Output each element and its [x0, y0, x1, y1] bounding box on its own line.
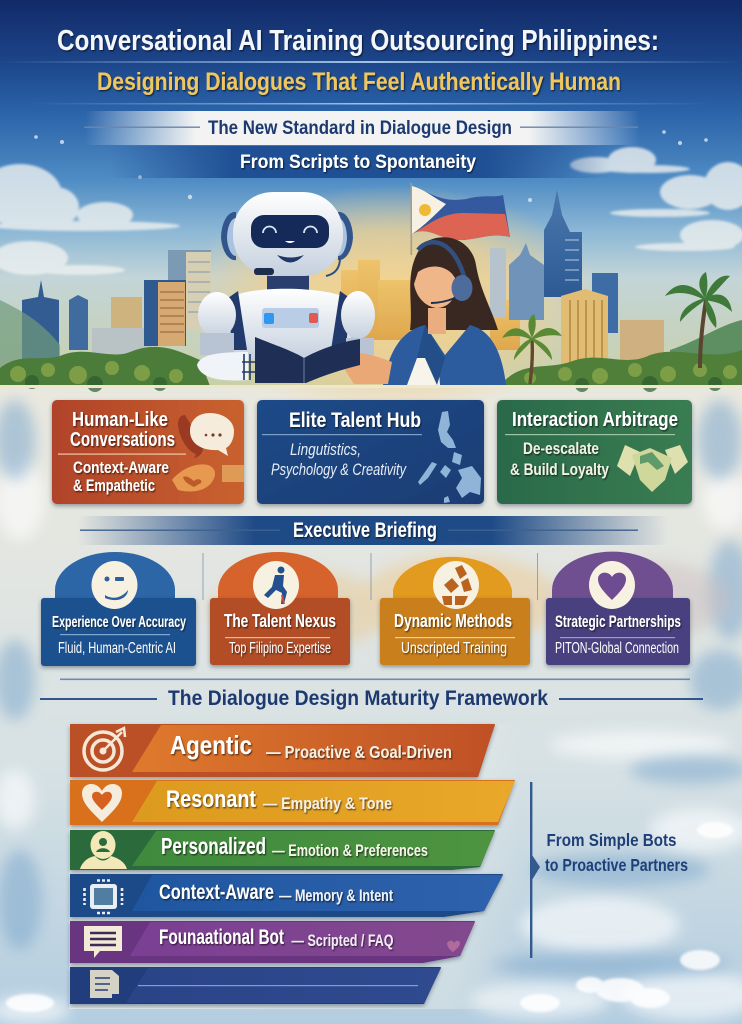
banner: new standard: The New Standard in Dialogue Design: [208, 117, 512, 139]
icon: Philippines map: [418, 411, 481, 503]
woman headset: [418, 242, 465, 280]
banner: from scripts to spontaneity: [110, 146, 610, 178]
panel: Experience Over Accuracy: Fluid, Human-Centric AI: [58, 640, 176, 657]
bar: Personalized: — Emotion & Preferences: [272, 842, 428, 860]
panel: Human-Like Conversations: Conversations: [70, 429, 175, 451]
panel: The Talent Nexus: Top Filipino Expertise: [229, 640, 331, 657]
bar: Foundational Bot: — Scripted / FAQ: [292, 932, 394, 950]
woman face: [414, 266, 456, 308]
panel: Human-Like Conversations: [52, 400, 244, 504]
hero: sky and clouds: [0, 0, 742, 415]
header band lines: [0, 61, 742, 104]
city skyline: [0, 190, 742, 392]
panel: The Talent Nexus: [210, 552, 350, 665]
callout: from simple bots to proactive partners: to Proactive Partners: [545, 855, 688, 875]
panel: Dynamic Methods: Dynamic Methods: [394, 611, 512, 631]
icon: handshake: [617, 445, 688, 492]
bar: Agentic: — Proactive & Goal-Driven: [266, 742, 452, 762]
panel: Dynamic Methods: Unscripted Training: [401, 640, 507, 657]
icon: palm tree small: [502, 314, 562, 384]
icon: heart: [589, 561, 635, 609]
icon: person: [80, 831, 127, 869]
icon: chat bubbles: [178, 413, 234, 458]
panel: Elite Talent Hub: Elite Talent Hub: [289, 409, 421, 432]
panel: Human-Like Conversations: Context-Aware: [73, 458, 169, 477]
callout: from simple bots to proactive partners: [545, 830, 688, 875]
woman blazer: [383, 325, 506, 385]
icon: open book: [255, 337, 360, 383]
subtitle: Designing Dialogues That Feel Authentically Human: [97, 68, 621, 96]
arrow: maturity direction: [530, 782, 540, 958]
bar: Agentic: Agentic: [170, 730, 252, 760]
icon: target: [84, 728, 125, 770]
icon: document: [90, 970, 119, 998]
banner: from scripts to spontaneity: From Scripts to Spontaneity: [240, 151, 476, 173]
icon: caring hand: [172, 464, 244, 491]
decorative briefing backdrop: [210, 555, 730, 650]
panel: The Talent Nexus: The Talent Nexus: [224, 611, 336, 631]
robot arms: [197, 291, 375, 380]
panel: Elite Talent Hub: [257, 400, 484, 504]
divider line: [60, 678, 690, 680]
banner: new standard: [84, 111, 640, 145]
icon: chat lines: [84, 926, 122, 958]
hills and foliage: [0, 300, 742, 392]
bar: Context-Aware: Context-Aware: [159, 881, 274, 904]
icon: palm tree right: [665, 272, 732, 368]
bar: base layer: [70, 967, 441, 1004]
heading: Executive Briefing: Executive Briefing: [293, 519, 437, 542]
bar: Context-Aware: — Memory & Intent: [279, 887, 393, 905]
panel: Human-Like Conversations: Human-Like: [72, 409, 168, 431]
heading: maturity framework: The Dialogue Design Maturity Framework: [168, 687, 548, 710]
panel: Experience Over Accuracy: [41, 552, 196, 666]
icon: Philippine flag: [410, 183, 510, 255]
panel: Interaction Arbitrage: & Build Loyalty: [510, 460, 609, 479]
icon: talking face: [92, 561, 138, 609]
panel: Interaction Arbitrage: De-escalate: [523, 439, 599, 458]
robot torso: [228, 289, 352, 360]
hero bottom edge: [0, 385, 742, 388]
callout: from simple bots to proactive partners: From Simple Bots: [546, 830, 677, 850]
panel: Human-Like Conversations: & Empathetic: [73, 476, 155, 495]
bar: Personalized: [70, 830, 495, 870]
robot head: [221, 192, 353, 276]
bar: Foundational Bot: [70, 921, 475, 963]
illustration: woman with headset: [336, 237, 506, 385]
panel: Elite Talent Hub: Psychology & Creativity: [271, 460, 407, 479]
bar: Agentic: [70, 724, 495, 777]
bar: Personalized: Personalized: [161, 833, 266, 859]
icon: building blocks: [433, 561, 479, 609]
woman hand: [336, 351, 392, 384]
icon: chip: [84, 880, 122, 913]
icon: running figure: [253, 561, 299, 609]
panel: Strategic Partnerships: [546, 552, 690, 665]
panel: Interaction Arbitrage: Interaction Arbitrage: [512, 409, 678, 431]
icon: heart outline: [82, 784, 122, 822]
bar: Resonant: — Empathy & Tone: [263, 794, 392, 813]
panel: Strategic Partnerships: Strategic Partnerships: [555, 612, 681, 631]
bar: Foundational Bot: Founaational Bot: [159, 926, 284, 949]
panel: Experience Over Accuracy: Experience Over Accuracy: [52, 614, 186, 631]
panel: Interaction Arbitrage: [497, 400, 692, 504]
bar: Resonant: Resonant: [166, 786, 256, 813]
bar: Resonant: [70, 780, 515, 825]
background: lower cloudy sky: [0, 386, 742, 1024]
illustration: robot: [197, 192, 375, 380]
panel: Dynamic Methods: [380, 557, 530, 665]
panel: Strategic Partnerships: PITON-Global Connection: [555, 640, 679, 657]
woman hair: [410, 237, 498, 330]
bar: Context-Aware: [70, 874, 503, 917]
heading: Executive Briefing: [78, 516, 668, 545]
pale panel behind framework: [69, 724, 521, 1009]
panel: Elite Talent Hub: Lingutistics,: [290, 440, 361, 459]
